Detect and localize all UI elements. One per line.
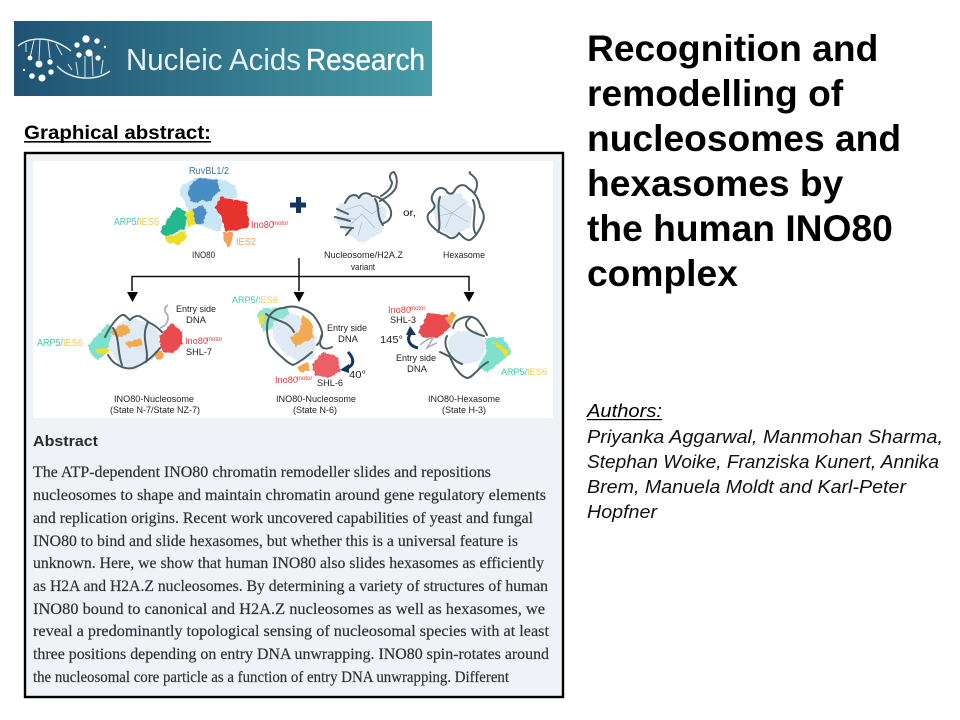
INO80 complex structure: IES6	[139, 217, 159, 228]
icon: plus sign	[290, 197, 306, 213]
state N-7 structure: motor	[207, 337, 222, 343]
state N-7 structure: (State N-7/State NZ-7)	[110, 405, 200, 416]
state H-3 structure: (State H-3)	[442, 405, 486, 416]
abstract body text: INO80 to bind and slide hexasomes, but whether this is a universal feature is	[33, 533, 518, 550]
abstract heading: Abstract	[33, 433, 98, 450]
state N-7 structure: IES6	[63, 338, 83, 349]
INO80 complex structure	[114, 166, 288, 261]
journal logo banner: Research	[306, 43, 425, 77]
authors heading: Authors:	[586, 401, 662, 421]
state N-6 structure: Entry side	[327, 323, 367, 334]
panel: graphical abstract and abstract	[25, 153, 563, 697]
state N-7 structure	[37, 304, 222, 416]
arrows: branching tree	[127, 258, 474, 302]
title: the human INO80	[587, 207, 893, 249]
abstract body text	[33, 464, 550, 686]
title: nucleosomes and	[587, 117, 901, 159]
state H-3 structure: Entry side	[396, 353, 436, 364]
title: hexasomes by	[587, 162, 844, 204]
state N-6 structure: 40°	[349, 369, 366, 381]
panel: schematic figure	[33, 161, 553, 418]
state N-7 structure: ARP5/	[37, 338, 63, 349]
abstract body text: unknown. Here, we show that human INO80 also slides hexasomes as efficiently	[33, 555, 544, 572]
state N-6 structure: motor	[297, 376, 312, 382]
abstract body text: the nucleosomal core particle as a function of entry DNA unwrapping. Different	[33, 669, 510, 686]
abstract body text: The ATP-dependent INO80 chromatin remodeller slides and repositions	[33, 464, 491, 481]
or label: or,	[403, 208, 416, 219]
state H-3 structure	[380, 305, 547, 416]
title: complex	[587, 252, 738, 294]
N-7 labels: Entry side	[176, 304, 216, 315]
authors list: Priyanka Aggarwal, Manmohan Sharma,	[587, 427, 943, 447]
N-6 labels: ARP5/	[232, 295, 258, 306]
state N-7 structure: INO80-Nucleosome	[114, 394, 194, 405]
authors list: Stephan Woike, Franziska Kunert, Annika	[587, 452, 939, 472]
H-3 labels: Ino80	[388, 305, 411, 316]
INO80 complex structure: ARP5/	[114, 217, 139, 228]
state N-6 structure	[232, 295, 367, 416]
state N-7 structure: DNA	[186, 315, 207, 326]
state H-3 structure: motor	[410, 306, 425, 312]
abstract body text: three positions depending on entry DNA unwrapping. INO80 spin-rotates around	[33, 646, 549, 663]
title: Recognition and	[587, 27, 878, 69]
INO80 complex structure: Ino80	[251, 220, 274, 231]
icon: DNA helix with dots	[18, 35, 110, 82]
title	[587, 27, 901, 294]
title: remodelling of	[587, 72, 844, 114]
authors list: Brem, Manuela Moldt and Karl-Peter	[587, 477, 907, 497]
INO80 complex structure: IES2	[236, 237, 256, 248]
nucleosome structure: Nucleosome/H2A.Z	[324, 250, 403, 261]
hexasome structure: Hexasome	[443, 250, 485, 261]
state H-3 structure: ARP5/	[501, 367, 527, 378]
state N-6 structure: IES6	[258, 295, 278, 306]
abstract body text: and replication origins. Recent work uncovered capabilities of yeast and fungal	[33, 510, 534, 527]
abstract body text: nucleosomes to shape and maintain chromatin around gene regulatory elements	[33, 487, 546, 504]
INO80 complex structure: INO80	[192, 250, 215, 261]
state H-3 structure: SHL-3	[390, 315, 416, 326]
graphical abstract heading: Graphical abstract:	[24, 122, 211, 144]
nucleosome structure: variant	[351, 262, 375, 273]
state H-3 structure: INO80-Hexasome	[428, 394, 500, 405]
abstract body text: INO80 bound to canonical and H2A.Z nucleosomes as well as hexasomes, we	[33, 601, 545, 618]
state N-7 structure: Ino80	[185, 336, 208, 347]
icon: 40 degree rotation arrow	[340, 352, 353, 373]
logo wordmark: Nucleic Acids	[126, 43, 301, 77]
state N-6 structure: INO80-Nucleosome	[276, 394, 356, 405]
abstract body text: as H2A and H2A.Z nucleosomes. By determining a variety of structures of human	[33, 578, 548, 595]
state N-6 structure: Ino80	[275, 375, 298, 386]
icon: 145 degree rotation arrow	[406, 326, 418, 348]
abstract body text: reveal a predominantly topological sensing of nucleosomal species with at least	[33, 623, 550, 640]
journal logo banner	[14, 21, 432, 96]
hexasome structure	[428, 172, 485, 261]
state N-6 structure: DNA	[338, 334, 359, 345]
state N-6 structure: (State N-6)	[293, 405, 337, 416]
state N-6 structure: SHL-6	[317, 378, 343, 389]
authors list: Hopfner	[587, 502, 658, 522]
state H-3 structure: IES6	[527, 367, 547, 378]
state N-7 structure: SHL-7	[186, 347, 212, 358]
state H-3 structure: DNA	[407, 364, 428, 375]
nucleosome structure	[324, 172, 403, 273]
state H-3 structure: 145°	[380, 334, 403, 346]
authors list	[587, 427, 943, 522]
INO80 complex structure: motor	[273, 221, 288, 227]
complex labels: RuvBL1/2	[189, 166, 229, 177]
